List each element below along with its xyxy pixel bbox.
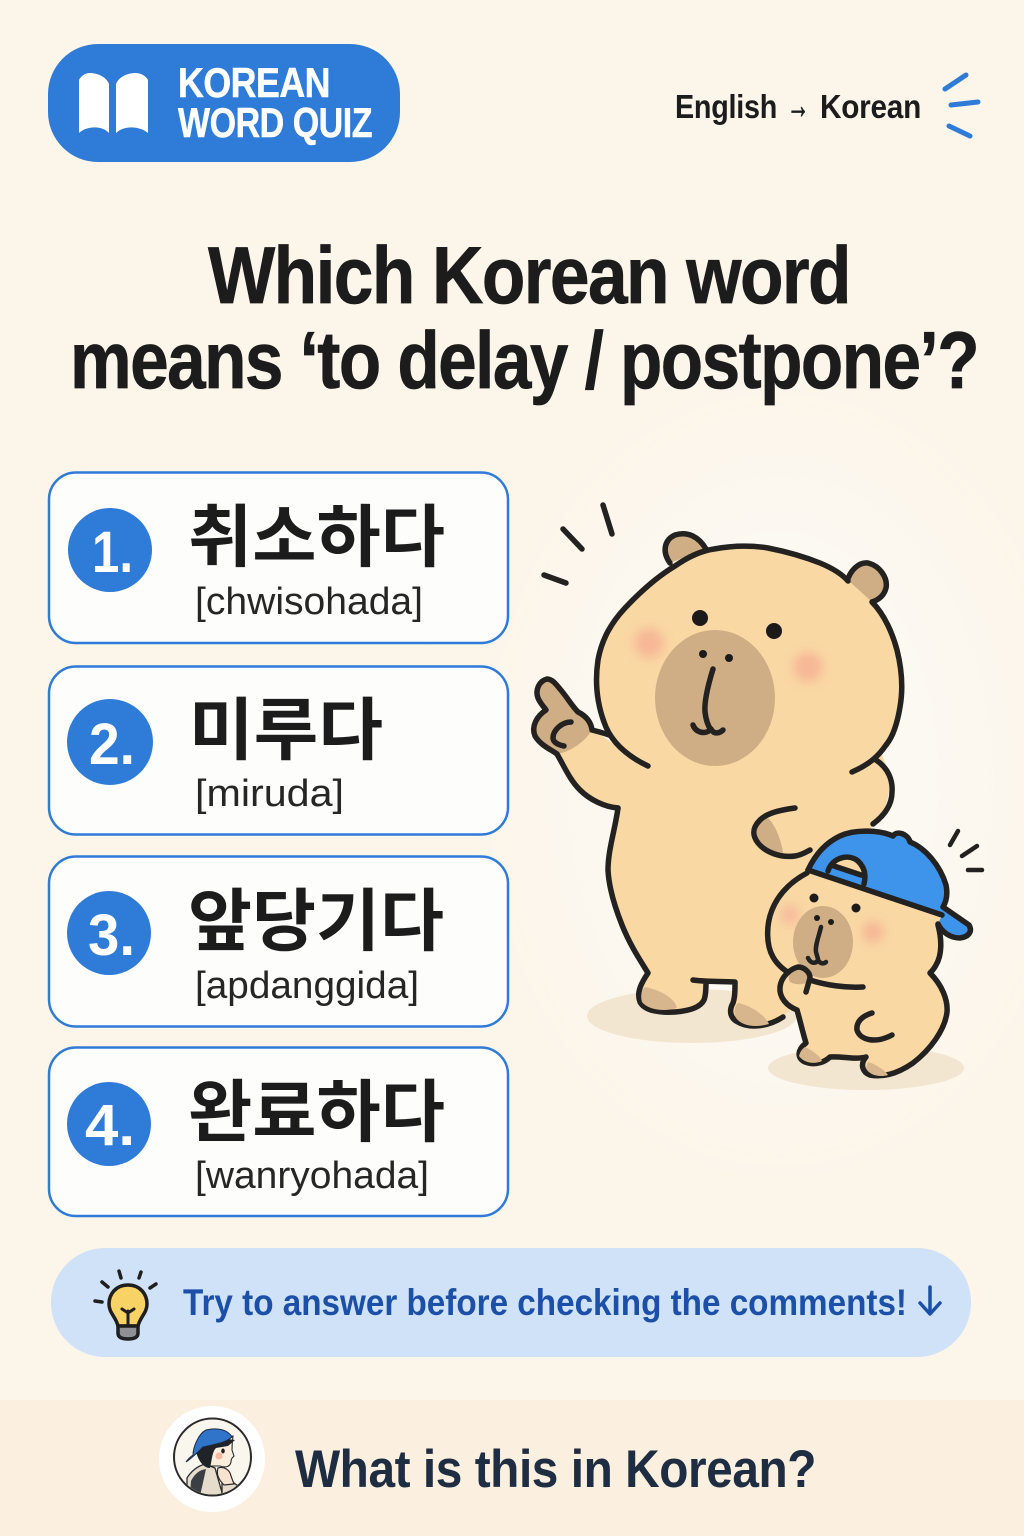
baby outline — [768, 873, 807, 977]
baby action lines — [950, 831, 982, 870]
badge: Korean Word Quiz — [48, 44, 400, 162]
option 2 — [49, 666, 508, 834]
icon: light bulb — [95, 1271, 156, 1339]
head — [596, 546, 902, 800]
option 1 — [49, 472, 508, 643]
avatar — [159, 1406, 265, 1512]
baby fist and arm — [780, 967, 863, 1010]
baby body fill — [768, 873, 947, 1076]
badge text: WORD QUIZ — [178, 99, 372, 146]
body outline — [608, 808, 783, 1026]
footer text: What is this in Korean? — [295, 1440, 816, 1499]
option 3: [apdanggida] — [195, 965, 419, 1007]
option 1: [chwisohada] — [195, 581, 423, 623]
option 2: 2. — [89, 712, 135, 777]
ground shadow — [587, 989, 797, 1043]
face — [634, 610, 823, 766]
icon: open book — [79, 73, 148, 133]
label: English to Korean: → — [787, 85, 809, 127]
body fill — [606, 740, 889, 1027]
option 3: 앞당기다 — [188, 884, 444, 960]
option 2: [miruda] — [195, 773, 344, 815]
title: Which Korean word — [208, 231, 850, 321]
illustration: baby capybara with blue cap — [768, 831, 982, 1090]
baby feet — [799, 1047, 888, 1076]
ground shadow — [768, 1046, 964, 1090]
baby lower hand — [857, 1013, 892, 1040]
icon: down arrow — [920, 1287, 940, 1314]
baby cap — [808, 831, 970, 938]
label: English to Korean — [675, 85, 921, 127]
option 1: 1. — [92, 520, 133, 585]
option 1: 취소하다 — [188, 500, 445, 576]
option 4: 완료하다 — [188, 1075, 445, 1151]
option 4: [wanryohada] — [195, 1155, 429, 1197]
badge text — [178, 59, 372, 146]
option 2: 미루다 — [189, 693, 383, 769]
baby face — [780, 894, 884, 978]
pointing arm and hand — [534, 679, 650, 812]
label: English to Korean: Korean — [820, 88, 921, 125]
option 3 — [49, 856, 508, 1026]
option 4 — [49, 1048, 508, 1216]
ears — [665, 534, 886, 602]
option 3: 3. — [88, 903, 135, 968]
illustration: big capybara pointing — [534, 505, 902, 1043]
option 4: 4. — [85, 1093, 135, 1158]
label: English to Korean: English — [675, 88, 777, 125]
icon: blue accent dashes — [945, 75, 978, 136]
badge text: KOREAN — [178, 59, 330, 106]
feet shading — [641, 987, 769, 1026]
tip text: Try to answer before checking the comments! — [183, 1282, 907, 1323]
resting hand — [755, 816, 783, 853]
action lines — [544, 505, 612, 583]
tip banner — [51, 1248, 971, 1357]
footer band — [0, 1400, 1024, 1536]
title — [70, 231, 978, 406]
